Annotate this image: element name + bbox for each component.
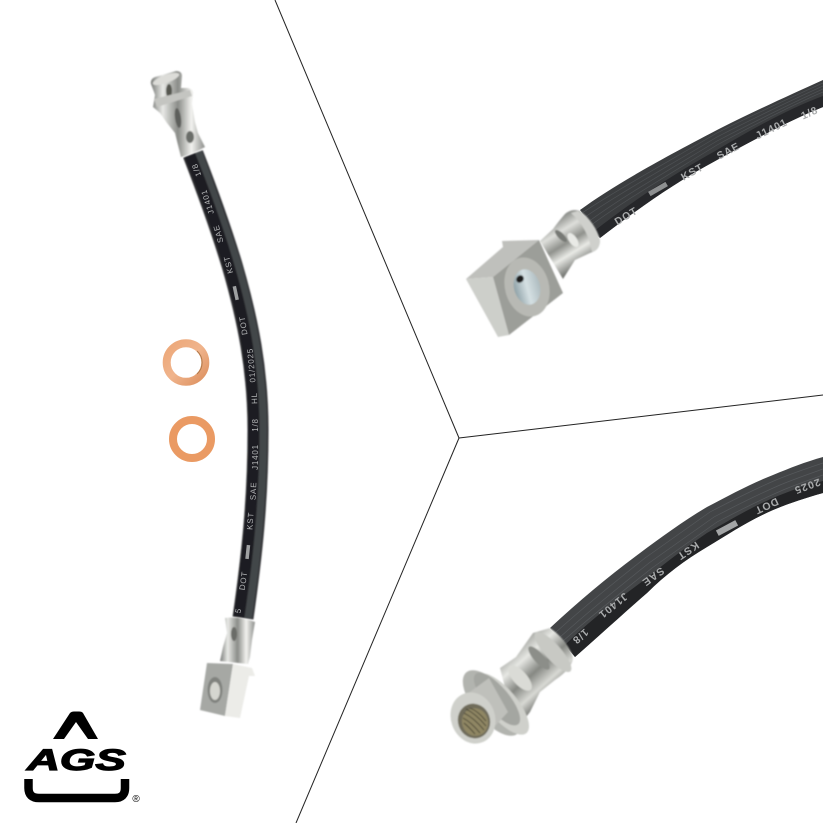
hose markings: 1/8 xyxy=(799,104,820,122)
hose markings: J1401 xyxy=(251,444,260,470)
copper washer, lower xyxy=(173,420,211,458)
hose markings: DOT xyxy=(238,570,249,591)
hose markings: KST xyxy=(674,539,701,562)
hose markings: J1401 xyxy=(199,188,216,215)
hose markings: SAE xyxy=(212,224,225,244)
copper washer, upper xyxy=(167,343,205,382)
hose markings: SAE xyxy=(715,140,742,162)
logo chevron xyxy=(53,712,98,739)
hose markings: SAE xyxy=(639,564,666,589)
detail view: block fitting xyxy=(466,80,823,337)
hose markings xyxy=(190,162,260,614)
hose markings: 2025 xyxy=(792,476,822,496)
hose markings: 1/8 xyxy=(251,418,260,432)
hose markings: 1/8 xyxy=(569,626,591,647)
top fitting xyxy=(151,70,205,157)
hose markings: KST xyxy=(679,161,706,183)
logo wordmark: AGS xyxy=(26,744,126,777)
hose markings: J1401 xyxy=(596,590,630,621)
crimp and neck xyxy=(540,210,600,279)
hose markings: HL xyxy=(250,392,259,404)
hose markings: KST xyxy=(222,255,235,274)
square block xyxy=(466,240,563,337)
divider lines xyxy=(275,0,823,823)
hose markings: 1/8 xyxy=(190,162,203,178)
hose body xyxy=(190,152,263,618)
hose markings xyxy=(613,104,820,228)
crimp and flange xyxy=(452,627,576,745)
hose section xyxy=(580,80,823,238)
hose markings: KST xyxy=(245,512,256,530)
hose markings: 01/2025 xyxy=(246,348,257,383)
logo base bracket xyxy=(28,779,125,798)
hose markings: DOT xyxy=(238,315,249,336)
threaded nose xyxy=(443,678,508,750)
bottom fitting xyxy=(200,618,255,718)
full brake hose, left view xyxy=(151,70,263,718)
registered mark: ® xyxy=(132,794,140,805)
hose markings: DOT xyxy=(752,495,780,516)
hose markings: J1401 xyxy=(754,116,790,142)
AGS logo xyxy=(26,712,140,805)
hose markings: 5 xyxy=(234,607,243,614)
detail view: threaded fitting xyxy=(443,457,823,750)
hose section xyxy=(550,457,823,657)
hose markings: DOT xyxy=(613,205,640,228)
hose markings xyxy=(569,476,822,647)
hose markings: SAE xyxy=(249,482,258,500)
